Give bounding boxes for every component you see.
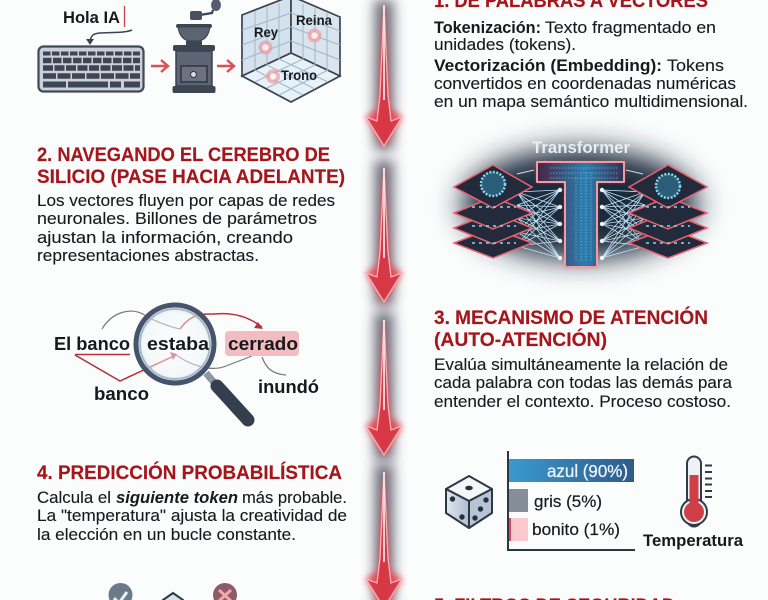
text: step 3 line 3: entender el contexto. Proceso costoso. [434, 392, 731, 411]
label: banco: banco [94, 383, 149, 404]
arrow 1 [366, 0, 402, 150]
illustration: probability prediction [446, 451, 744, 550]
label: azul: azul (90%) [547, 461, 628, 481]
icon: shield [163, 593, 183, 600]
text: step 4 line 3: la elección en un bucle constante. [37, 525, 296, 544]
text: step 2 line 2: neuronales. Billones de parámetros [37, 209, 317, 228]
label: El banco: El banco [54, 333, 130, 354]
heading: step 4: 4. PREDICCIÓN PROBABILÍSTICA [37, 460, 342, 484]
text: step 4 line 1: más probable. [242, 488, 347, 507]
text: step 3 line 2: cada palabra con todas las demás para [434, 373, 733, 392]
flow arrows: central column [366, 0, 402, 600]
arrow 3 [366, 312, 402, 460]
arrow 2 [366, 160, 402, 306]
icon: check [108, 583, 132, 600]
text: step 4 line 1: siguiente token [116, 488, 238, 507]
text: vectorización line 3: en un mapa semántico multidimensional. [434, 92, 748, 111]
panel: step 1 text [434, 0, 748, 111]
arrow: keyboard to grinder [151, 60, 168, 72]
illustration: Transformer network [454, 138, 707, 267]
text: step 4 line 1: Calcula el [37, 488, 111, 507]
text: vectorización: Vectorización (Embedding): [434, 56, 662, 75]
text: vectorización line 2: convertidos en coordenadas numéricas [434, 74, 736, 93]
label: Transformer: Transformer [532, 138, 630, 157]
label: inundó: inundó [258, 376, 319, 397]
icon: keyboard [38, 30, 144, 92]
attention curves [75, 311, 286, 381]
icon: left neural layers [454, 165, 532, 258]
heading: step 3 line 2: (AUTO-ATENCIÓN) [434, 327, 607, 351]
label: bonito: bonito (1%) [532, 520, 620, 539]
icon: thermometer [681, 456, 712, 526]
label: Trono: Trono [281, 67, 317, 83]
text: step 2 line 4: representaciones abstractas. [37, 246, 259, 265]
text: step 4 line 2: La "temperatura" ajusta la creatividad de [37, 506, 347, 525]
label: gris: gris (5%) [534, 492, 602, 511]
label: Reina: Reina [296, 12, 332, 28]
heading: step 2 line 2: SILICIO (PASE HACIA ADELANTE) [37, 166, 345, 188]
text: tokenización: Tokenización: [434, 18, 541, 37]
label: Temperatura: Temperatura [643, 531, 744, 550]
text: vectorización: Tokens [667, 56, 724, 75]
dark glow background [462, 148, 698, 260]
chart: 3D semantic cube [242, 0, 340, 102]
icon: cross [213, 583, 237, 600]
bar chart: token probabilities [508, 451, 635, 550]
icon: coffee grinder [172, 0, 221, 93]
icon: dice [446, 476, 492, 528]
text: tokenización line 2: unidades (tokens). [434, 35, 576, 54]
icon: right neural layers [629, 165, 707, 258]
arrow 4 [366, 464, 402, 600]
label: estaba: estaba [147, 333, 210, 354]
panel: step 3 text [434, 305, 733, 411]
icon: glowing T [537, 162, 624, 267]
text: tokenización: Texto fragmentado en [545, 18, 716, 37]
panel: step 4 text [37, 460, 347, 544]
text: step 2 line 1: Los vectores fluyen por capas de redes [37, 191, 335, 210]
text: step 2 line 3: ajustan la información, creando [37, 228, 293, 247]
cerrado highlight [225, 331, 299, 356]
label: Rey: Rey [254, 24, 278, 40]
heading: step 2 line 1: 2. NAVEGANDO EL CEREBRO DE [37, 144, 330, 166]
magnifier lens [136, 305, 248, 420]
label: cerrado: cerrado [228, 333, 298, 354]
bar: gris [509, 489, 528, 512]
illustration: text to tokens to embedding map [38, 0, 340, 102]
label: Hola IA typed text: Hola IA [63, 8, 120, 27]
network connections [517, 170, 645, 260]
text: step 3 line 1: Evalúa simultáneamente la relación de [434, 355, 728, 374]
illustration: safety filter icons [108, 583, 237, 600]
bar: bonito [509, 518, 528, 541]
text: step 4 line 1 [37, 488, 347, 507]
text: tokenización [434, 18, 716, 37]
panel: step 2 text [37, 144, 345, 265]
bar: azul [509, 459, 634, 482]
illustration: attention magnifier [54, 305, 319, 420]
arrow: grinder to map [217, 60, 234, 72]
heading: step 3 line 1: 3. MECANISMO DE ATENCIÓN [434, 305, 708, 329]
